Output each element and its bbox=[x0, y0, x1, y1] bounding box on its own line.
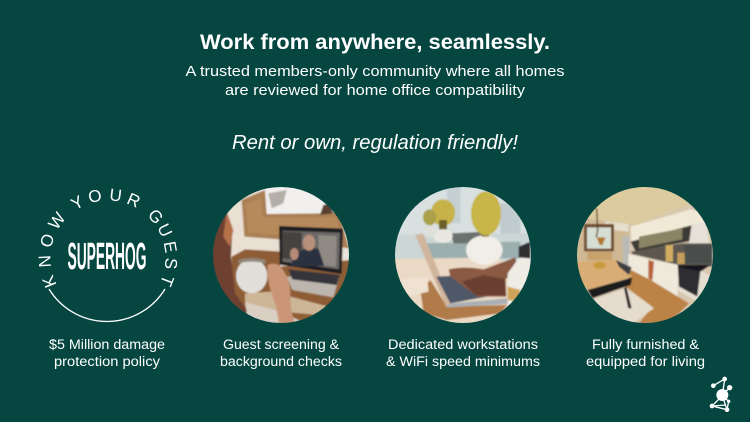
badge: know your guest: SUPERHOG bbox=[68, 236, 146, 278]
badge: know your guest: W bbox=[45, 209, 69, 233]
caption: damage protection: protection policy bbox=[54, 354, 160, 369]
caption: damage protection: $5 Million damage bbox=[49, 337, 165, 352]
photo: video call on laptop bbox=[213, 187, 349, 323]
title: Work from anywhere, seamlessly. bbox=[200, 31, 550, 54]
subtitle bbox=[186, 63, 564, 99]
caption: guest screening: background checks bbox=[220, 354, 342, 369]
tagline: Rent or own, regulation friendly! bbox=[232, 132, 518, 154]
badge: know your guest: E bbox=[160, 240, 180, 254]
photo: typing on laptop bbox=[395, 187, 531, 323]
panel: guest screening bbox=[213, 187, 349, 369]
badge: know your guest: T bbox=[156, 272, 178, 289]
panel: furnished home bbox=[577, 187, 713, 369]
badge: know your guest bbox=[35, 185, 181, 322]
caption: workstations: Dedicated workstations bbox=[388, 337, 538, 352]
badge: know your guest: Y bbox=[68, 192, 87, 214]
caption: furnished bbox=[586, 337, 705, 369]
photo: kitchen and dining table bbox=[577, 187, 713, 323]
badge: know your guest: N bbox=[35, 255, 55, 268]
subtitle: are reviewed for home office compatibility bbox=[225, 82, 526, 99]
caption: damage protection bbox=[49, 337, 165, 369]
icon: network logo bbox=[710, 377, 732, 412]
badge: know your guest: G bbox=[144, 205, 167, 228]
panel: workstations bbox=[386, 180, 540, 369]
badge: know your guest: R bbox=[124, 189, 143, 212]
caption: guest screening: Guest screening & bbox=[223, 337, 339, 352]
caption: guest screening bbox=[220, 337, 342, 369]
badge: know your guest: K bbox=[38, 272, 61, 290]
badge: know your guest: S bbox=[161, 257, 181, 270]
caption: furnished: Fully furnished & bbox=[592, 337, 699, 352]
caption: workstations bbox=[386, 337, 540, 369]
caption: furnished: equipped for living bbox=[586, 354, 705, 369]
subtitle: A trusted members-only community where all homes bbox=[186, 63, 564, 80]
badge: know your guest: O bbox=[86, 186, 103, 207]
badge: know your guest: U bbox=[108, 185, 123, 206]
badge: know your guest: U bbox=[153, 221, 176, 240]
caption: workstations: & WiFi speed minimums bbox=[386, 354, 540, 369]
badge: know your guest: O bbox=[36, 232, 58, 250]
panel: Superhog damage protection bbox=[35, 185, 181, 369]
